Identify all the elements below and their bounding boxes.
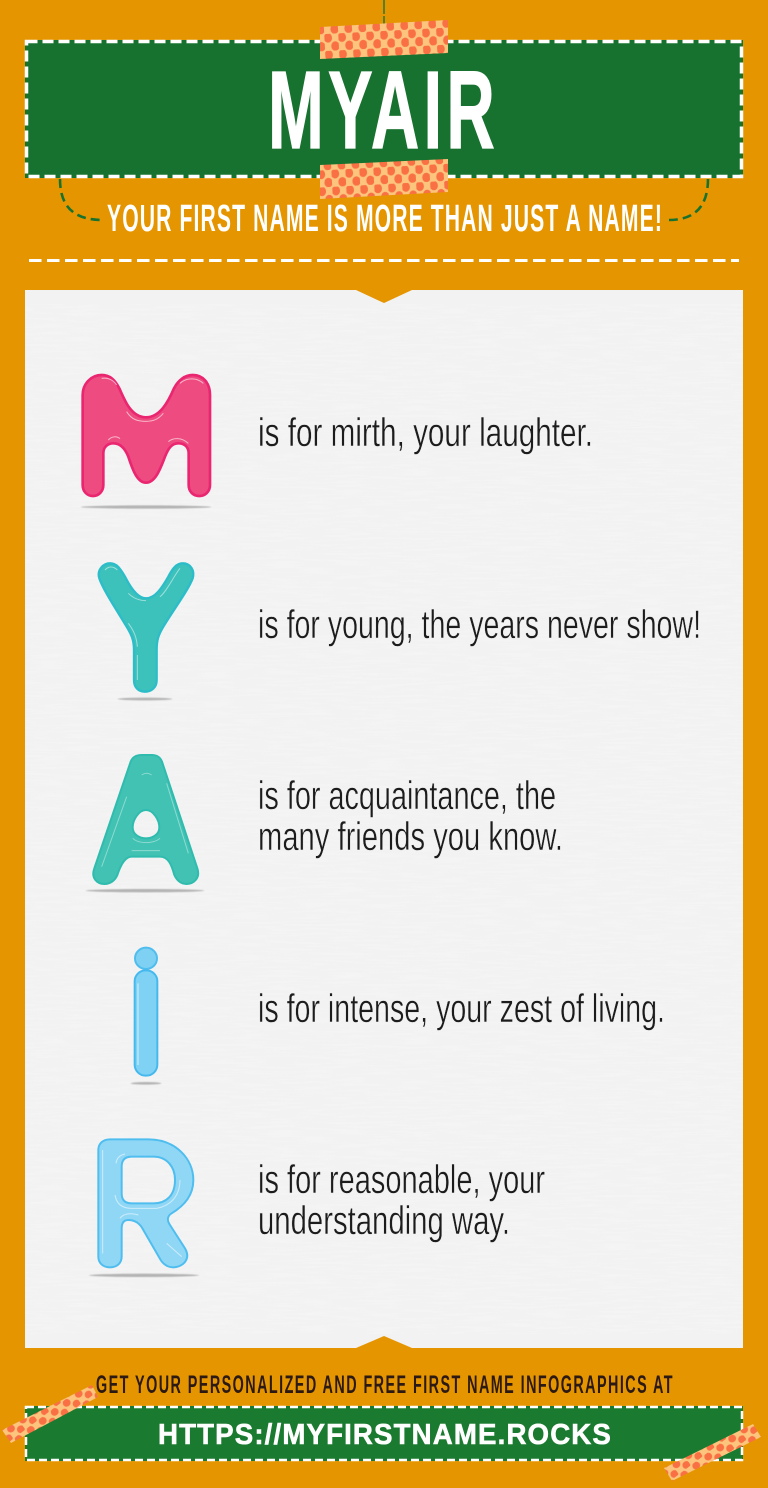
letter A row: [86, 755, 563, 892]
footer URL: HTTPS://MYFIRSTNAME.ROCKS: [158, 1419, 612, 1451]
icon: letter A: [86, 755, 204, 892]
hanging string: [383, 0, 385, 24]
letter I row: [131, 948, 665, 1085]
title: MYAIR: [268, 49, 499, 172]
panel: name letters: [25, 290, 743, 1348]
footer banner: [25, 1406, 743, 1461]
letter R row: [89, 1139, 545, 1277]
tape: top of banner: [320, 20, 448, 59]
icon: letter Y: [99, 563, 193, 700]
text: R lines: [258, 1158, 545, 1243]
tape: footer left: [2, 1385, 98, 1443]
panel background: [25, 290, 743, 1348]
icon: letter R: [89, 1139, 199, 1277]
tape: bottom of banner: [320, 159, 448, 199]
text: R lines: is for reasonable, your: [258, 1158, 545, 1202]
text: A lines: many friends you know.: [258, 815, 563, 859]
text: R lines: understanding way.: [258, 1199, 510, 1243]
tape: footer right: [664, 1424, 761, 1481]
dashed curved connectors: [60, 179, 708, 220]
dashed divider: [29, 259, 739, 262]
icon: letter i: [131, 948, 161, 1085]
letter Y row: [99, 563, 701, 700]
letter M row: [81, 375, 593, 509]
text: M line: is for mirth, your laughter.: [258, 411, 593, 455]
icon: letter M: [81, 375, 211, 509]
text: A lines: [258, 774, 563, 859]
paper texture: [25, 304, 743, 1334]
text: A lines: is for acquaintance, the: [258, 774, 556, 818]
title banner: [25, 40, 743, 178]
